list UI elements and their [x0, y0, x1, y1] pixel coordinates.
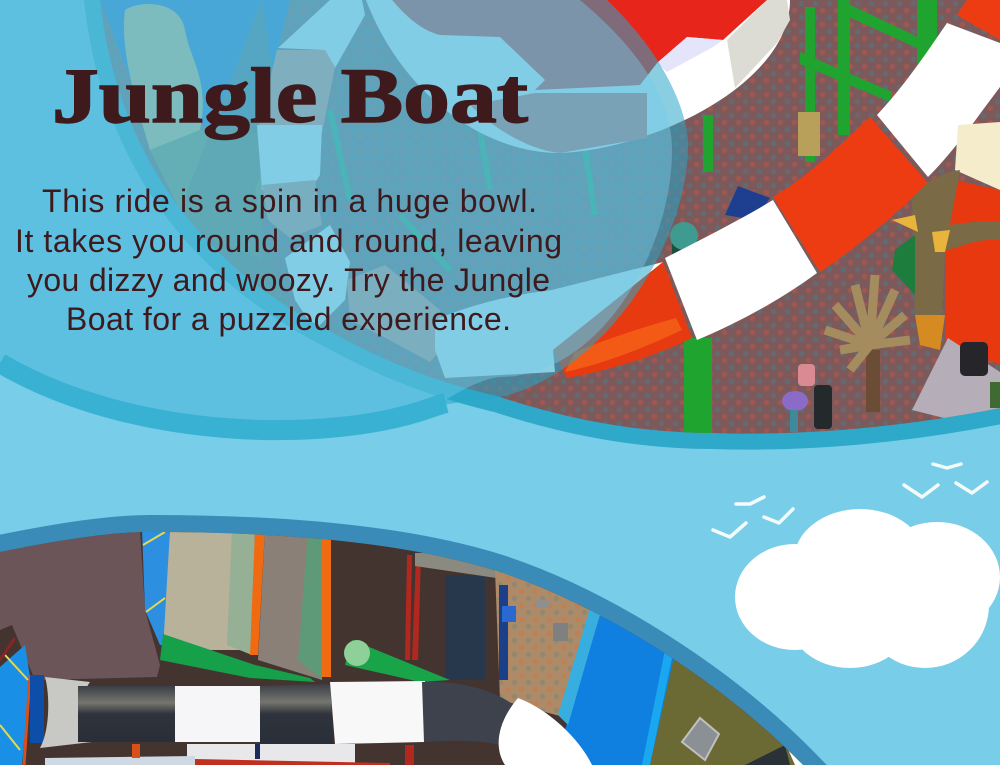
title: Jungle Boat [52, 52, 528, 139]
bottom photo border band [0, 532, 803, 765]
blue tile [725, 186, 770, 220]
dark blue block [445, 575, 485, 680]
sign [798, 112, 820, 156]
tree and decorated wall [955, 122, 1000, 190]
top photo: aerial view of red and white water slide [90, 0, 1000, 440]
silver collar [40, 677, 92, 748]
grey tile [553, 623, 568, 641]
white mat [912, 338, 1000, 422]
left blue panel [0, 645, 30, 765]
dark corner and white edge [745, 745, 790, 765]
lower wave band [0, 363, 446, 430]
top photo border band [100, 0, 1000, 434]
black chair [960, 342, 988, 376]
grass [650, 652, 800, 765]
translucent ring around circle [0, 0, 688, 430]
body text: It takes you round and round, leaving [15, 223, 562, 259]
cloud [735, 509, 1000, 668]
body text [15, 183, 562, 337]
bottom photo: black and white water slide [0, 525, 830, 765]
birds [713, 464, 987, 537]
blue glitter collar [30, 675, 44, 743]
sky and ground under overlay [100, 0, 290, 130]
body text: Boat for a puzzled experience. [66, 301, 511, 337]
palm tree [825, 275, 910, 412]
teal post cap [672, 240, 698, 256]
person [502, 606, 516, 622]
body text: This ride is a spin in a huge bowl. [42, 183, 537, 219]
striped awning [415, 553, 510, 580]
green scaffold [684, 0, 937, 434]
slide tube [553, 262, 692, 378]
green bars [160, 634, 315, 682]
blue ladder [558, 608, 600, 725]
black and white pipe [78, 681, 592, 765]
green pipe [344, 640, 450, 682]
red stripes [405, 555, 421, 660]
people [782, 364, 832, 432]
orange stripe two [322, 535, 331, 677]
green shrub [990, 382, 1000, 408]
paved area [495, 570, 610, 720]
translucent light circle behind text [0, 0, 672, 430]
spiral tube under overlay [278, 0, 365, 68]
grey square [682, 718, 719, 760]
green grate [227, 530, 255, 655]
blue strip [142, 530, 170, 645]
structure below pipe [187, 744, 355, 765]
orange stripe [250, 530, 265, 655]
blue slab [565, 605, 680, 765]
bowl [366, 0, 790, 153]
body text: you dizzy and woozy. Try the Jungle [27, 262, 550, 298]
roof [0, 530, 160, 680]
beige wall [164, 532, 240, 650]
grey wall [258, 530, 322, 680]
green grate two [298, 538, 325, 680]
